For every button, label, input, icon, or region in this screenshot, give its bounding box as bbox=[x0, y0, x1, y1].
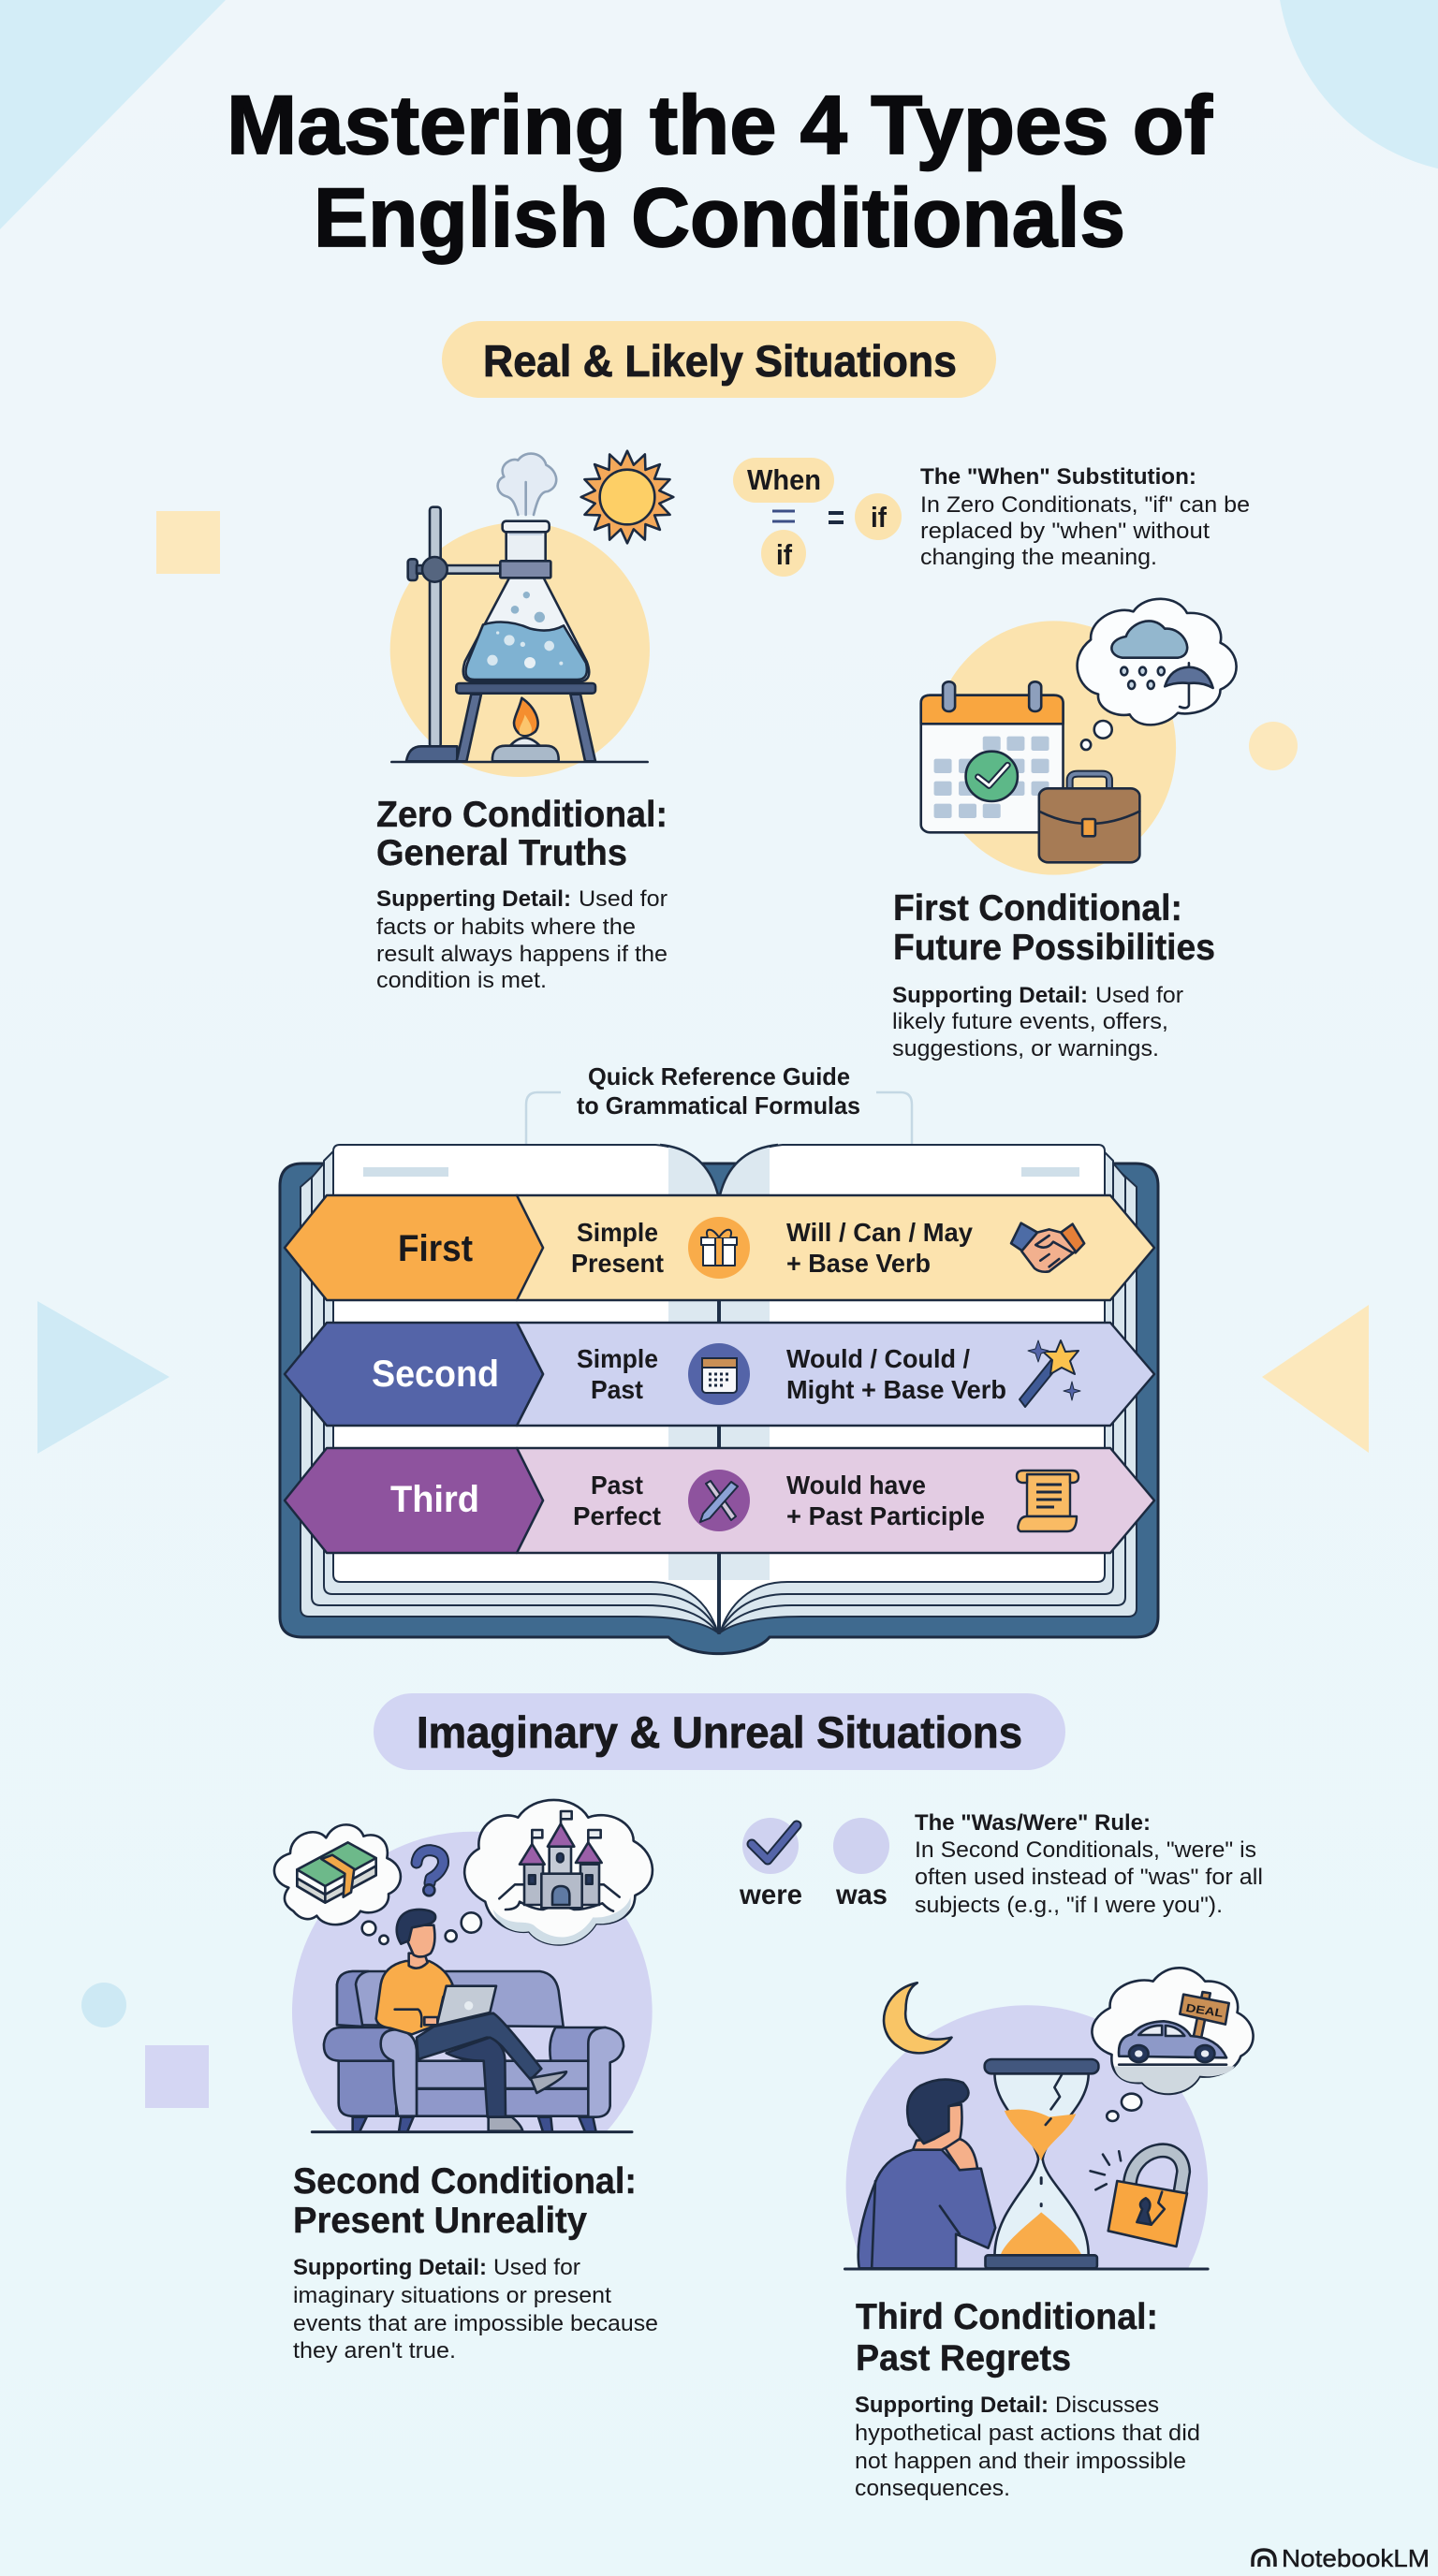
second conditional text: imaginary situations or present bbox=[293, 2283, 611, 2308]
second conditional text: events that are impossible because bbox=[293, 2311, 658, 2336]
third conditional text: consequences. bbox=[855, 2476, 1010, 2501]
row: first: Simple bbox=[577, 1218, 658, 1247]
decor: blue dot bbox=[81, 1983, 126, 2027]
was/were rule note bbox=[915, 1810, 1263, 1918]
zero conditional text: Zero Conditional: bbox=[376, 795, 668, 835]
row: second: Second bbox=[372, 1354, 499, 1395]
zero conditional text: facts or habits where the bbox=[376, 915, 636, 940]
when equals if diagram: if bbox=[871, 501, 888, 534]
when substitution note: The "When" Substitution: bbox=[920, 464, 1196, 490]
icon: handshake bbox=[1011, 1223, 1084, 1272]
third conditional text: Past Regrets bbox=[856, 2338, 1071, 2378]
section pill: imaginary and unreal: Imaginary & Unreal Situations bbox=[417, 1707, 1022, 1757]
second conditional text: Present Unreality bbox=[293, 2201, 587, 2241]
row: second: Past bbox=[591, 1375, 643, 1404]
row: first: + Base Verb bbox=[786, 1249, 931, 1278]
zero conditional text: Supperting Detail: bbox=[376, 886, 571, 912]
was/were rule note: subjects (e.g., "if I were you"). bbox=[915, 1893, 1223, 1918]
when equals if diagram: if bbox=[776, 538, 793, 571]
first conditional text: Future Possibilities bbox=[893, 928, 1215, 968]
second conditional text: Used for bbox=[493, 2255, 580, 2280]
when equals if diagram: When bbox=[747, 463, 821, 496]
decor: yellow dot bbox=[1249, 722, 1298, 770]
were versus was diagram: were bbox=[739, 1880, 802, 1910]
when substitution note bbox=[920, 464, 1250, 570]
row: first: Present bbox=[571, 1249, 664, 1278]
title: Mastering the 4 Types of bbox=[227, 78, 1212, 171]
row: second: Would / Could / bbox=[786, 1344, 970, 1373]
illustration: man with hourglass, moon, lock and car thought: DEAL bbox=[1185, 2001, 1225, 2020]
when equals if diagram bbox=[733, 458, 902, 577]
icon: scroll bbox=[1017, 1471, 1078, 1531]
decor: yellow square bbox=[156, 511, 220, 574]
notebooklm logo: NotebookLM bbox=[1282, 2544, 1430, 2572]
zero conditional text: Used for bbox=[579, 886, 668, 912]
quick reference heading: Quick Reference Guide bbox=[588, 1062, 850, 1090]
third conditional text: Supporting Detail: bbox=[855, 2393, 1049, 2418]
icon: magic wand bbox=[1020, 1340, 1080, 1407]
zero conditional text: result always happens if the bbox=[376, 942, 668, 967]
section pill: real and likely bbox=[442, 321, 996, 398]
when substitution note: changing the meaning. bbox=[920, 545, 1157, 570]
third conditional text: hypothetical past actions that did bbox=[855, 2421, 1200, 2446]
when substitution note: replaced by "when" without bbox=[920, 519, 1210, 544]
zero conditional text bbox=[376, 795, 668, 993]
row: second bbox=[285, 1323, 1154, 1426]
decor: top-right circle bbox=[1277, 0, 1438, 174]
third conditional text: Discusses bbox=[1055, 2393, 1159, 2418]
title: English Conditionals bbox=[314, 170, 1125, 264]
row: third: Third bbox=[390, 1479, 479, 1520]
was/were rule note: The "Was/Were" Rule: bbox=[915, 1810, 1151, 1836]
row: first: First bbox=[398, 1228, 473, 1269]
page layers bbox=[301, 1145, 1137, 1633]
decor: lavender square bbox=[145, 2045, 209, 2108]
first conditional text: likely future events, offers, bbox=[892, 1009, 1168, 1034]
row: second: Simple bbox=[577, 1344, 658, 1373]
section pill: real and likely: Real & Likely Situations bbox=[483, 336, 957, 386]
icon: pencil and ruler bbox=[700, 1481, 738, 1522]
illustration: flask and sun bbox=[390, 451, 673, 777]
second conditional text: Second Conditional: bbox=[293, 2161, 637, 2202]
quick reference heading: to Grammatical Formulas bbox=[577, 1091, 860, 1120]
illustration: calendar, briefcase and rain thought bbox=[921, 599, 1237, 875]
row: third bbox=[285, 1448, 1154, 1553]
when substitution note: In Zero Conditionats, "if" can be bbox=[920, 492, 1250, 518]
row: third: Past bbox=[591, 1471, 643, 1500]
book cover bbox=[280, 1164, 1158, 1654]
zero conditional text: General Truths bbox=[376, 833, 627, 873]
first conditional text: Used for bbox=[1095, 983, 1183, 1008]
icon: gift bbox=[701, 1230, 737, 1266]
illustration: man on sofa dreaming bbox=[274, 1800, 653, 2132]
second conditional text: Supporting Detail: bbox=[293, 2255, 487, 2280]
row: first: Will / Can / May bbox=[786, 1218, 973, 1247]
row: third: Perfect bbox=[573, 1501, 661, 1530]
was/were rule note: In Second Conditionals, "were" is bbox=[915, 1837, 1256, 1863]
second conditional text: they aren't true. bbox=[293, 2338, 456, 2364]
decor: blue triangle bbox=[37, 1301, 169, 1454]
first conditional text: First Conditional: bbox=[893, 888, 1182, 929]
row: third: + Past Participle bbox=[786, 1501, 985, 1530]
row: first bbox=[285, 1195, 1154, 1300]
first conditional text: Supporting Detail: bbox=[892, 983, 1088, 1008]
were versus was diagram bbox=[739, 1818, 889, 1910]
icon: small calendar bbox=[702, 1358, 737, 1393]
quick reference heading bbox=[577, 1062, 860, 1120]
were versus was diagram: was bbox=[835, 1880, 888, 1910]
section pill: imaginary and unreal bbox=[374, 1693, 1065, 1770]
decor: yellow triangle bbox=[1262, 1305, 1369, 1453]
first conditional text: suggestions, or warnings. bbox=[892, 1036, 1159, 1061]
decor: top-left triangle bbox=[0, 0, 226, 229]
third conditional text: Third Conditional: bbox=[856, 2297, 1158, 2337]
row: third: Would have bbox=[786, 1471, 926, 1500]
first conditional text bbox=[892, 888, 1215, 1061]
illustration: man with hourglass, moon, lock and car thought bbox=[844, 1968, 1254, 2269]
title bbox=[227, 78, 1212, 264]
third conditional text: not happen and their impossible bbox=[855, 2449, 1186, 2474]
was/were rule note: often used instead of "was" for all bbox=[915, 1865, 1263, 1890]
second conditional text bbox=[293, 2161, 658, 2364]
row: second: Might + Base Verb bbox=[786, 1375, 1006, 1404]
open book with formula rows bbox=[280, 1145, 1158, 1654]
third conditional text bbox=[855, 2297, 1200, 2501]
zero conditional text: condition is met. bbox=[376, 968, 547, 993]
